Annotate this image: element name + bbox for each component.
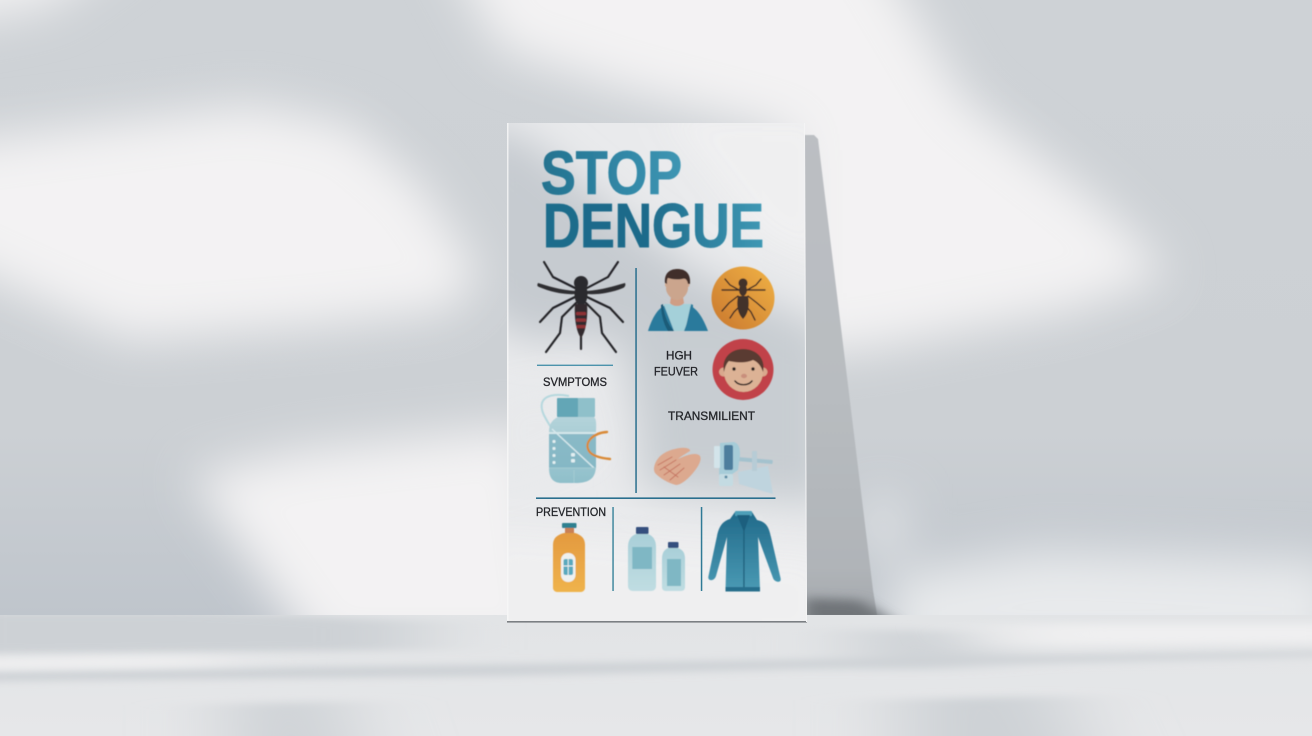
label: prevention: PREVENTION: [536, 505, 606, 519]
cast shadow behind poster: [804, 135, 900, 625]
icon: person: [648, 269, 708, 331]
icon: mosquito: [537, 262, 625, 352]
title: [541, 139, 764, 261]
icon: water bottle: [542, 395, 610, 483]
title: STOP: [541, 139, 682, 207]
icon: child face in red circle: [712, 339, 774, 400]
horizontal divider: [536, 497, 776, 499]
title: DENGUE: [543, 192, 764, 261]
icon: mosquito in orange circle: [712, 266, 774, 330]
icon: long-sleeve jacket: [708, 511, 781, 592]
icon: orange repellent bottle: [553, 523, 585, 592]
label: high fever: [654, 348, 698, 378]
floor with soft shadow stripes: [0, 612, 1312, 736]
poster panel: [507, 123, 807, 623]
vertical divider: [635, 268, 637, 493]
icon: two blue bottles: [628, 527, 685, 591]
label: transmission: TRANSMILIENT: [668, 409, 755, 423]
label: symptoms: SVMPTOMS: [543, 375, 607, 389]
vertical divider left: [612, 507, 614, 591]
icon: medical device: [714, 442, 773, 494]
label: high fever: FEUVER: [654, 364, 698, 378]
icon: hands: [654, 448, 701, 485]
vertical divider right: [701, 507, 702, 591]
label: high fever: HGH: [666, 348, 692, 362]
short divider above symptoms: [537, 365, 613, 366]
